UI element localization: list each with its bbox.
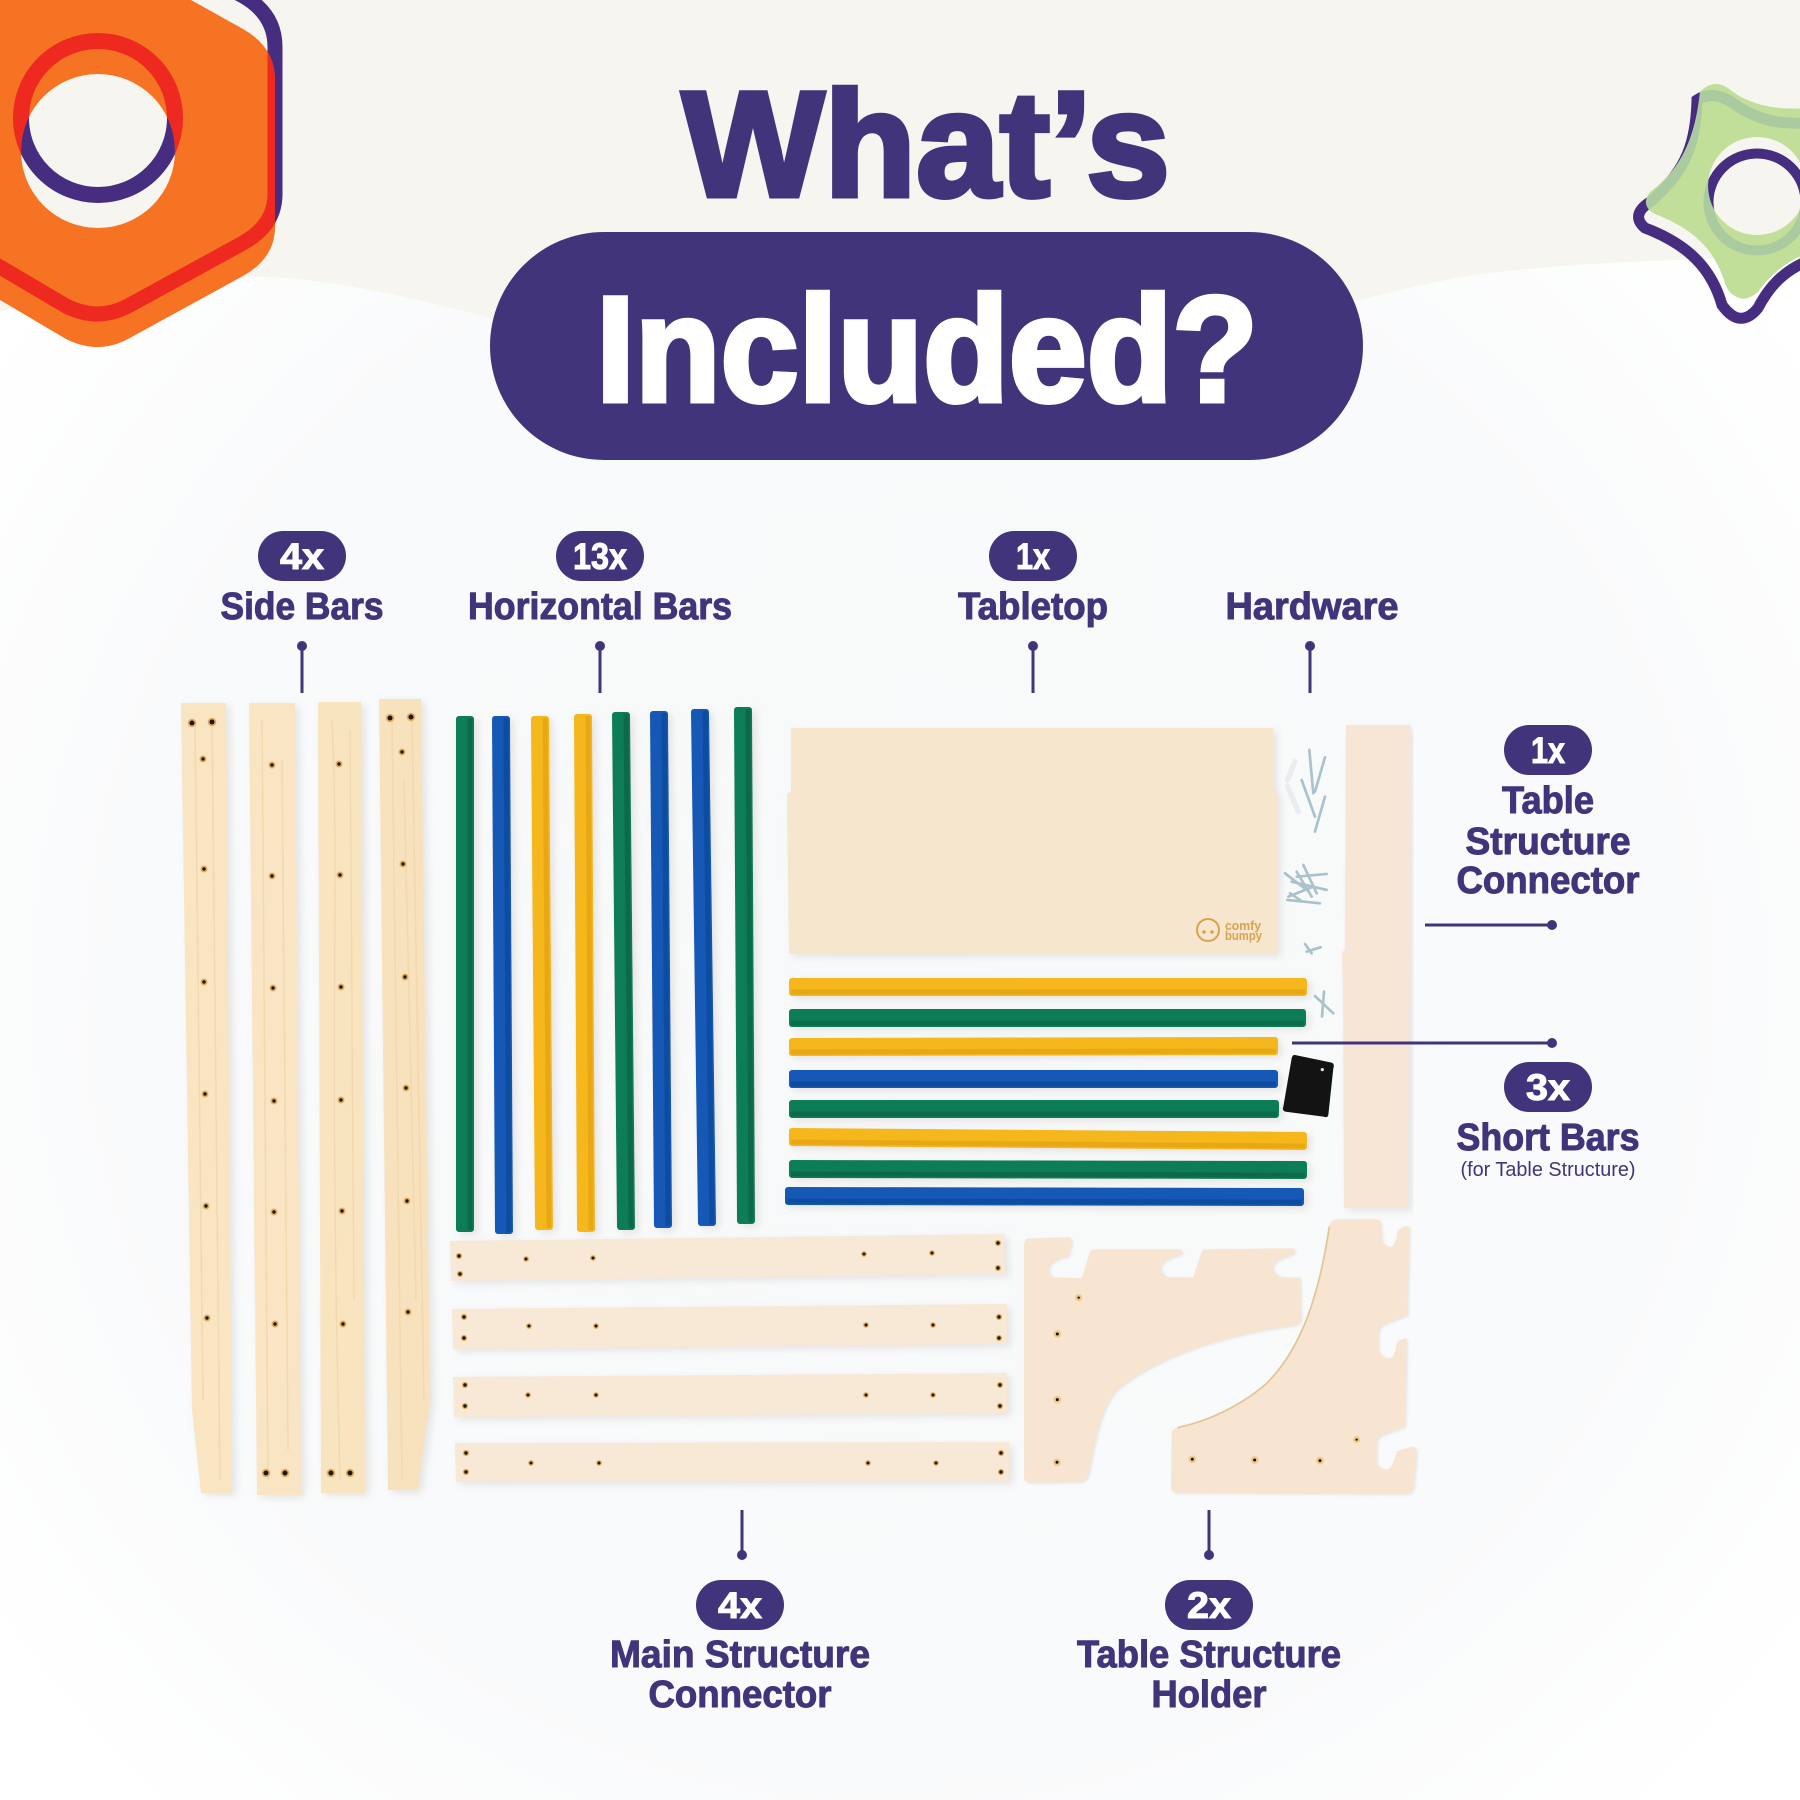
title pill: Included? [490, 232, 1363, 460]
logo: comfy bumpy: comfy [1225, 918, 1262, 933]
label: main structure connector: Main Structure [610, 1634, 870, 1676]
label: table structure connector: Connector [1456, 860, 1640, 902]
label: table structure holder [1077, 1510, 1341, 1716]
parts: side bars [181, 699, 430, 1495]
label: short bars [1292, 1038, 1640, 1181]
label: main structure connector: Connector [648, 1674, 832, 1716]
parts: table structure holders [1024, 1219, 1417, 1494]
label: short bars: (for Table Structure) [1460, 1159, 1636, 1181]
parts: tabletop [787, 728, 1277, 954]
label: short bars: Short Bars [1456, 1117, 1640, 1159]
label: tabletop: 1x [1016, 536, 1050, 577]
label: main structure connector: 4x [718, 1585, 762, 1626]
label: side bars [220, 531, 384, 693]
label: table structure connector [1425, 725, 1640, 930]
parts: horizontal coloured bars [787, 981, 1305, 1203]
label: table structure holder: Holder [1152, 1674, 1267, 1716]
label: table structure holder: Table Structure [1077, 1634, 1341, 1676]
parts: hardware [1283, 750, 1334, 1117]
parts: vertical coloured bars [459, 709, 752, 1232]
label: hardware: Hardware [1226, 586, 1398, 628]
logo: comfy bumpy [1197, 918, 1263, 943]
title: What's: What’s [682, 60, 1170, 228]
label: horizontal bars: 13x [573, 536, 627, 577]
icon: green star knob [1639, 84, 1800, 318]
label: main structure connector [610, 1510, 870, 1716]
label: tabletop [958, 531, 1108, 693]
label: horizontal bars: Horizontal Bars [468, 586, 732, 628]
logo: comfy bumpy: bumpy [1225, 928, 1263, 943]
label: table structure connector: Table [1502, 780, 1594, 822]
label: hardware [1226, 586, 1398, 693]
label: horizontal bars [468, 531, 732, 693]
label: side bars: 4x [280, 536, 324, 577]
label: table structure holder: 2x [1187, 1585, 1231, 1626]
parts: main structure connectors [450, 1234, 1009, 1482]
label: table structure connector: Structure [1466, 821, 1630, 863]
label: short bars: 3x [1526, 1067, 1570, 1108]
label: tabletop: Tabletop [958, 586, 1108, 628]
title pill: Included?: Included? [596, 265, 1258, 433]
parts: table structure connector [1342, 725, 1410, 1208]
label: side bars: Side Bars [220, 586, 384, 628]
label: table structure connector: 1x [1531, 730, 1565, 771]
icon: orange hex nut [0, 0, 275, 347]
header background wave [0, 0, 1800, 330]
